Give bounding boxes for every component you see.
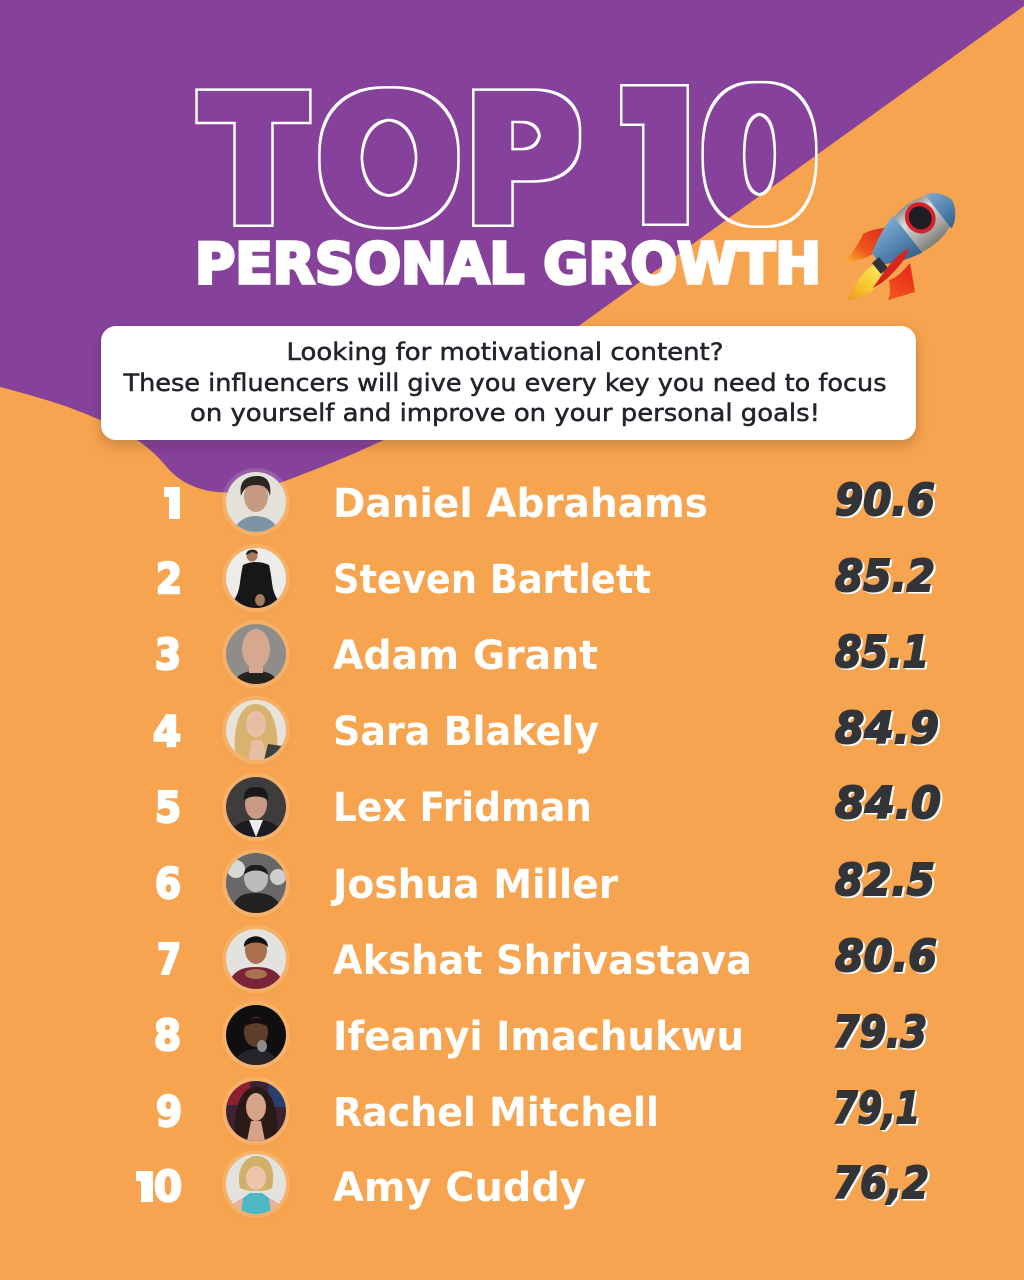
list: scores shadow: 85.1 xyxy=(837,628,931,680)
title: TOP 10 outlined xyxy=(195,80,818,230)
text: intro line 1: Looking for motivational content? xyxy=(286,338,724,366)
list: scores: 84.0 xyxy=(835,778,941,829)
panel: intro card xyxy=(101,326,916,440)
list: scores: 82.5 xyxy=(835,855,935,906)
text: intro line 3: on yourself and improve on your personal goals! xyxy=(190,399,820,427)
list: scores xyxy=(833,475,941,1209)
title: TOP 10 outlined: 1 xyxy=(605,54,719,263)
list: scores: 79,1 xyxy=(833,1083,920,1134)
list: ranks: 9 xyxy=(156,1087,182,1136)
avatar: Akshat Shrivastava xyxy=(222,925,290,993)
list: scores shadow: 84.0 xyxy=(837,780,943,830)
list: ranks: 8 xyxy=(154,1011,181,1060)
list: scores shadow: 76,2 xyxy=(835,1160,931,1210)
title: TOP 10 outlined: P xyxy=(462,60,582,264)
avatar: Joshua Miller xyxy=(222,849,290,917)
list: names: Sara Blakely xyxy=(333,709,599,755)
avatar: Steven Bartlett xyxy=(222,544,290,612)
list: names: Ifeanyi Imachukwu xyxy=(333,1014,744,1060)
avatar: Daniel Abrahams xyxy=(222,468,290,536)
list: scores shadow: 80.6 xyxy=(837,932,939,984)
icon: rocket xyxy=(844,181,967,300)
list: names: Lex Fridman xyxy=(333,785,592,831)
list: ranks: 0 xyxy=(154,1162,182,1211)
list: names: Steven Bartlett xyxy=(333,557,651,603)
list: names: Adam Grant xyxy=(333,633,598,679)
list: scores: 79.3 xyxy=(833,1007,927,1058)
list: ranks xyxy=(136,487,182,1203)
background: purple wave shape xyxy=(0,0,1024,492)
list: scores shadow: 79.3 xyxy=(835,1008,929,1060)
avatar: Rachel Mitchell xyxy=(222,1077,290,1145)
list: scores shadow: 79,1 xyxy=(835,1084,922,1136)
avatar: Sara Blakely xyxy=(222,696,290,764)
list: names: Amy Cuddy xyxy=(333,1165,586,1211)
avatar: Lex Fridman xyxy=(222,773,290,841)
heading: PERSONAL GROWTH: PERSONAL GROWTH xyxy=(195,232,821,297)
list: scores: 84.9 xyxy=(835,703,939,754)
list: ranks: 7 xyxy=(157,935,181,984)
title: TOP 10 outlined: O xyxy=(315,60,463,264)
title: TOP 10 outlined: 0 xyxy=(698,54,820,263)
avatar: Amy Cuddy xyxy=(222,1150,290,1218)
list: scores: 90.6 xyxy=(835,475,935,526)
title: TOP 10 outlined: T xyxy=(200,60,307,264)
list: scores shadow: 84.9 xyxy=(837,704,941,756)
list: ranks: 1 xyxy=(128,1162,157,1211)
text: intro line 2: These influencers will give you every key you need to focus xyxy=(122,369,887,397)
list: ranks: 3 xyxy=(155,630,181,679)
list: scores: 80.6 xyxy=(835,931,937,982)
list: ranks: 5 xyxy=(155,783,181,832)
list: scores shadow: 82.5 xyxy=(837,856,937,908)
list: names: Rachel Mitchell xyxy=(333,1090,659,1136)
list: scores shadow: 85.2 xyxy=(837,552,937,604)
list: scores shadow: 90.6 xyxy=(837,476,937,528)
list: ranks: 6 xyxy=(155,859,181,908)
avatar: Adam Grant xyxy=(222,620,290,688)
list: scores shadow xyxy=(835,476,943,1210)
list: ranks: 2 xyxy=(156,554,182,603)
list: ranks: 4 xyxy=(153,707,181,756)
avatar: Ifeanyi Imachukwu xyxy=(222,1001,290,1069)
list: names: Akshat Shrivastava xyxy=(333,938,752,984)
list: names: Joshua Miller xyxy=(330,862,618,908)
list: scores: 85.1 xyxy=(835,627,929,678)
list: ranks: 1 xyxy=(156,479,185,528)
list: names xyxy=(330,481,752,1211)
list: scores: 85.2 xyxy=(835,551,935,602)
list: names: Daniel Abrahams xyxy=(333,481,708,527)
list: scores: 76,2 xyxy=(833,1158,929,1209)
